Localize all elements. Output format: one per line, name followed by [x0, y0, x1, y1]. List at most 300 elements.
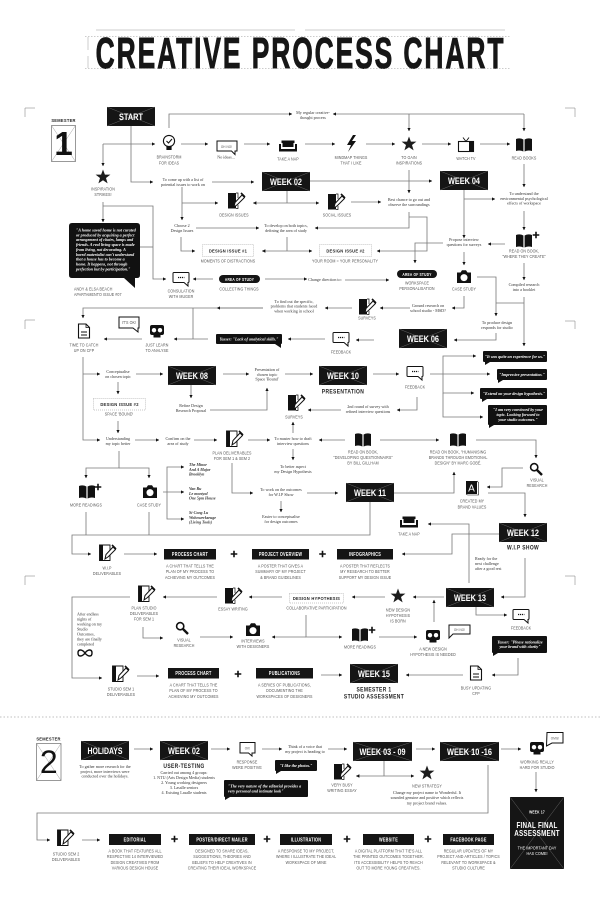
- label: new hypothesis: HYPOTHESIS: [386, 613, 410, 618]
- icon: feedback: [333, 332, 349, 346]
- text: facebook description: REGULAR UPDATES OF MY: [444, 848, 493, 854]
- arrow: [83, 373, 100, 375]
- callout: editorial nature: "The very nature of the editorial provides a: [228, 784, 301, 788]
- callout: quote 3: "Extend on your design hypothesis.": [483, 391, 545, 396]
- icon: book 3: [450, 433, 466, 446]
- text: ground research: Ground research on: [412, 303, 444, 308]
- label: to gain inspirations: INSPIRATIONS: [396, 160, 422, 166]
- label: more readings 2: MORE READINGS: [344, 644, 376, 650]
- panel: semester 2 marker: [36, 736, 61, 780]
- icon: skull 2: [426, 630, 440, 642]
- callout: quote 4: "I am very convinced by your: [493, 407, 543, 412]
- box: website: WEBSITE: [379, 837, 398, 842]
- callout: home quote: [69, 223, 140, 288]
- text: source: ANDY & ELSA BEACH: [74, 286, 112, 292]
- label: to gain inspirations: TO GAIN: [401, 154, 417, 160]
- text: produce design: responds for studio: [481, 325, 513, 330]
- arrow: [480, 143, 510, 145]
- week 12: WEEK 12: [507, 527, 539, 538]
- label: surveys: SURVEYS: [358, 315, 376, 321]
- label: developing questionnaires: BY BILL GILLHAM: [347, 460, 379, 466]
- box: process chart 2: [168, 668, 219, 678]
- arrow: [352, 596, 385, 598]
- arrow: [523, 164, 525, 187]
- label: new design needed: A NEW DESIGN: [419, 646, 447, 652]
- week 11: [346, 483, 394, 502]
- text: compiled research: Compiled research: [509, 282, 539, 287]
- arrow: [196, 227, 259, 229]
- panel: semester 2 marker: SEMESTER: [36, 736, 61, 742]
- callout: home quote: that a house has to become a: [76, 257, 125, 262]
- label: mindmap: THAT I LIKE: [341, 160, 362, 166]
- text: change direction: Change direction to:: [308, 277, 342, 282]
- arrow: [315, 212, 409, 228]
- callout: quote 2: [497, 369, 547, 383]
- icon: A brand: A: [468, 484, 475, 494]
- arrow: [356, 339, 374, 341]
- text: process chart description 2: ACHIEVING MY OUTCOMES: [168, 693, 219, 699]
- arrow: booklet to quotes: [523, 297, 525, 346]
- label: plan deliverables: FOR SEM 1 & SEM 2: [214, 455, 251, 461]
- arrow: [476, 440, 536, 458]
- arrow: [306, 615, 342, 637]
- icon: star new strategy: [420, 766, 434, 779]
- arrow: [262, 748, 282, 750]
- week 08: WEEK 08: [176, 370, 208, 381]
- text: easier conceptualise: for design outcomes: [264, 519, 298, 524]
- text: presentation of topic: chosen topic: [257, 372, 277, 377]
- holidays: [81, 741, 129, 760]
- text: master draft: interview questions: [277, 441, 309, 446]
- label: space bound: SPACE 'BOUND': [105, 411, 133, 417]
- start box: [107, 107, 155, 126]
- icon: star: [96, 170, 110, 183]
- arrow: [305, 143, 335, 145]
- text: publications description: A SERIES OF PUBLICATIONS,: [258, 682, 311, 688]
- arrow: [285, 373, 313, 375]
- label: feedback: FEEDBACK: [331, 349, 351, 355]
- label: busy updating: CFP: [472, 690, 480, 696]
- arrow: [211, 748, 230, 750]
- callout: editorial nature: very personal and intimate look": [228, 788, 284, 794]
- arrow: [223, 373, 249, 375]
- icon: magnifier 2: [177, 623, 188, 634]
- box: facebook: FACEBOOK PAGE: [450, 837, 487, 842]
- text: after endless nights: Outcomes,: [77, 632, 95, 638]
- arrow: brainstorm up: [169, 114, 292, 128]
- arrow: [117, 421, 119, 433]
- arrow: [443, 356, 476, 374]
- arrow: across to doc: [83, 308, 263, 318]
- arrow: [86, 451, 119, 478]
- label: consultation: CONSULATION: [168, 288, 194, 294]
- arrow: [454, 333, 496, 340]
- arrow: [288, 338, 325, 340]
- callout: home quote: friends. A real living space is made: [76, 242, 135, 247]
- arrow: [366, 143, 395, 145]
- panel: final assessment: FINAL FINAL: [516, 820, 558, 830]
- week 04: [440, 171, 488, 190]
- text: work on outcomes: To work on the outcomes: [260, 487, 302, 492]
- icon: A brand: [466, 481, 478, 495]
- label: studio sem 1: DELIVERABLES: [107, 692, 135, 697]
- text: after endless nights: working on my: [77, 622, 103, 626]
- week 13: WEEK 13: [454, 592, 486, 603]
- icon: tv: [458, 138, 474, 152]
- arrow: [190, 385, 192, 398]
- label: plan studio: DELIVERABLES: [130, 611, 158, 616]
- callout: home quote: bored materialist can't understand: [76, 252, 135, 257]
- label: brainstorm: BRAINSTORM: [157, 154, 182, 160]
- label: interviews: INTERVIEWS: [241, 638, 265, 644]
- label: consultation: WITH MUGER: [169, 294, 193, 299]
- box: infographics: INFOGRAPHICS: [349, 551, 381, 557]
- icon: feedback 2: [407, 366, 423, 380]
- text: choose 2: Design Issues: [171, 228, 194, 233]
- arrow: [397, 397, 417, 410]
- callout: pill area of study 1: [219, 275, 260, 283]
- label: inspiration strikes: STRIKES!: [94, 191, 112, 197]
- week 02 s2: [160, 741, 208, 760]
- text: case study 3: (Living Tools): [189, 520, 213, 525]
- icon: omg bubble: [546, 732, 563, 746]
- icon: sofa 2: [400, 516, 418, 528]
- arrow: [523, 263, 525, 280]
- icon: ok bubble: OK!: [245, 746, 250, 751]
- text: after endless nights: completed: [77, 642, 94, 646]
- callout: home quote: perfection but by participation.": [75, 266, 130, 271]
- text: refine design: Refine Design: [179, 403, 203, 408]
- arrow: [328, 748, 347, 750]
- text: case study 2: Le montyal: [188, 491, 208, 496]
- icon: book plus: [516, 232, 539, 248]
- label: just learn: TO ANALYSE: [145, 347, 169, 353]
- label: studio sem 1: STUDIO SEM 1: [108, 686, 135, 692]
- arrow: case study to ground: [452, 296, 464, 308]
- text: conceptualise: Conceptualise: [106, 369, 130, 374]
- text: master draft: To master how to draft: [274, 436, 312, 441]
- text: conceptualise: on chosen topic: [105, 374, 131, 379]
- icon: surveys 2: [288, 395, 305, 410]
- text: case study 3: Si-Cong Lu: [189, 510, 209, 515]
- arrow: issues to choose: [181, 187, 183, 220]
- panel: final assessment: THE IMPORTANT DAY: [518, 845, 556, 851]
- label: new hypothesis: NEW DESIGN: [386, 607, 410, 613]
- arrow: [380, 439, 439, 441]
- arrow: [345, 279, 389, 281]
- box: illustration: ILLUSTRATION: [291, 837, 321, 842]
- label: new hypothesis: IS BORN: [390, 618, 406, 624]
- arrow: [422, 143, 451, 145]
- callout: quote 4: topic. Looking forward to: [496, 412, 540, 417]
- icon: plus: [344, 836, 350, 842]
- icon: studio sem 1: [112, 666, 129, 682]
- text: groups: 2. Young working designers: [161, 780, 207, 785]
- arrow: [163, 596, 217, 598]
- icon: plus: [235, 671, 241, 677]
- text: groups: 1. NTU (Arts Design Media) students: [153, 775, 215, 780]
- box: design issue 1: DESIGN ISSUE #1: [209, 248, 247, 253]
- label: visual research: RESEARCH: [527, 482, 547, 488]
- heading: wip show: W.I.P SHOW: [507, 545, 539, 552]
- arrow: [210, 388, 267, 410]
- arrow: mid: [217, 307, 263, 309]
- arrow: [194, 439, 217, 441]
- box: design issue 2: DESIGN ISSUE #2: [326, 248, 365, 253]
- arrow: [443, 393, 483, 417]
- text: find specific: To find out the specific,: [275, 299, 313, 305]
- arrow: [428, 524, 469, 583]
- text: better aspect: To better aspect: [280, 464, 307, 469]
- text: poster description: CREATING THEIR IDEAL WORKSPACE: [188, 865, 256, 871]
- text: process chart description: A CHART THAT TELLS THE: [166, 563, 214, 569]
- box: process chart: [164, 549, 216, 560]
- icon: plus: [425, 836, 431, 842]
- text: gather research: project, more interviews were: [81, 769, 130, 775]
- heading: semester 1 studio assessment: STUDIO ASSESSMENT: [344, 694, 404, 701]
- callout: quote 3: [480, 388, 547, 402]
- text: infographics description: MY RESEARCH TO BETTER: [340, 569, 390, 574]
- label: essay writing: ESSAY WRITING: [218, 606, 248, 612]
- arrow: [380, 307, 410, 309]
- arrow: [124, 553, 157, 555]
- arrow: to design issue 2: [377, 243, 427, 251]
- heading: semester 1 studio assessment: SEMESTER 1: [357, 687, 392, 694]
- icon: its ok bubble: IT'S OK!: [122, 319, 136, 325]
- box: project overview: [252, 549, 309, 560]
- arrow: [248, 439, 270, 441]
- text: publications description: WORKSPACES OF DESIGNERS: [256, 693, 313, 699]
- icon: skull: [150, 325, 164, 338]
- arrow: [463, 252, 465, 265]
- arrow: [143, 627, 163, 638]
- text: poster description: SUGGESTIONS, THEORIES AND: [193, 854, 251, 859]
- label: visual research: VISUAL: [530, 477, 544, 483]
- arrow: inspiration to callout: [102, 202, 104, 222]
- text: infographics description: SUPPORT MY DESIGN ISSUE: [339, 574, 391, 580]
- arrow: [402, 534, 499, 554]
- arrow: [535, 772, 537, 792]
- arrow: [212, 181, 254, 183]
- icon: design issues: [228, 193, 245, 208]
- label: mindmap: MINDMAP THINGS: [335, 154, 367, 160]
- box: publications: [256, 668, 313, 678]
- week 15: [350, 664, 398, 683]
- text: produce design: To produce design: [482, 320, 512, 325]
- arrow: to studio sem 2: [37, 765, 488, 840]
- arrow: [232, 463, 253, 493]
- text: after endless nights: they are finally: [77, 636, 103, 642]
- arrow: [487, 468, 523, 487]
- panel: final assessment: WEEK 17: [529, 809, 545, 815]
- arrow: [134, 748, 153, 750]
- arrow: [307, 492, 338, 494]
- icon: book: [516, 138, 532, 152]
- arrow: choose to issue 1: [181, 237, 195, 251]
- arrow: doc down: [83, 357, 100, 440]
- arrow: [308, 409, 341, 411]
- callout: yasser: [216, 334, 282, 348]
- icon: book 2: [355, 433, 371, 446]
- icon: camera: [457, 270, 471, 283]
- callout: quote 2: "Impressive presentation.": [499, 372, 545, 377]
- text: project overview description: & BRAND GUIDELINES: [260, 574, 301, 580]
- icon: social issues: [328, 194, 345, 210]
- arrow: [244, 143, 270, 145]
- text: website description: ITS ACCESSIBILITY HELPS TO REACH: [354, 859, 423, 865]
- arrow: [325, 307, 352, 309]
- arrow: [321, 674, 342, 676]
- icon: oh no bubble: OH NO!: [221, 144, 232, 149]
- arrow: to design issues: [182, 202, 218, 204]
- text: develop both topics: defining the area of study: [265, 228, 308, 233]
- title: CREATIVE PROCESS CHART: [96, 28, 505, 78]
- text: illustration description: A RESPONSE TO MY PROJECT,: [278, 848, 334, 854]
- icon: studio sem 2: [58, 830, 74, 846]
- week 02: WEEK 02: [270, 176, 302, 187]
- text: facebook description: PROJECT AND ARTICLES / TOPICS: [437, 854, 500, 859]
- text: change name: Change my project name to Wonderful. It: [393, 790, 462, 795]
- text: presentation of topic: Presentation of: [255, 367, 280, 372]
- panel: semester 1 marker: SEMESTER: [51, 118, 76, 123]
- label: surveys 2: SURVEYS: [285, 414, 303, 420]
- text: presentation of topic: Space 'Bound': [255, 377, 279, 382]
- week 12: [499, 523, 547, 542]
- label: visual research 2: RESEARCH: [174, 642, 194, 648]
- icon: plus: [171, 836, 178, 842]
- text: process chart description: ACHIEVING MY OUTCOMES: [165, 574, 215, 580]
- week 15: WEEK 15: [358, 668, 390, 679]
- arrow: to brainstorm and star: [103, 143, 155, 145]
- box: facebook: [443, 834, 494, 845]
- label: feedback 3: FEEDBACK: [511, 625, 531, 631]
- box: poster: POSTER/DIRECT MAILER: [196, 837, 248, 842]
- week 03-09: WEEK 03 - 09: [360, 746, 406, 757]
- arrow: [119, 468, 149, 478]
- label: your room: YOUR ROOM = YOUR PERSONALITY: [312, 258, 378, 264]
- arrow: [406, 674, 463, 676]
- text: second round: 2nd round of survey with: [347, 404, 389, 409]
- label: developing questionnaires: "DEVELOPING QUESTIONNAIRS": [333, 455, 393, 460]
- arrow: [82, 839, 100, 841]
- text: ready for next: next challenge: [475, 561, 499, 566]
- box: poster: [189, 834, 255, 845]
- week 02: [262, 172, 310, 191]
- label: developing questionnaires: READ ON BOOK,: [348, 449, 378, 455]
- label: just learn: JUST LEARN: [146, 342, 168, 348]
- icon: essay: [334, 764, 351, 780]
- text: propose questions: Propose interview: [449, 237, 479, 242]
- icon: plan deliverables: [226, 431, 243, 446]
- text: editorial description: RESPECTIVE 14 INTERVIEWED: [107, 854, 163, 859]
- text: case study 1: The Minor: [189, 462, 207, 467]
- text: project overview description: SUMMARY OF MY PROJECT: [255, 569, 306, 574]
- text: develop both topics: To develop on both topics,: [264, 223, 308, 229]
- arrow: top line to book: [523, 114, 525, 131]
- callout: home quote: arrangement of chairs, lamps and: [76, 237, 134, 242]
- text: come up with list: To come up with a list of: [163, 177, 204, 182]
- text: infographics description: A POSTER THAT REFLECTS: [340, 563, 390, 569]
- text: come up with list: potential issues to work on: [161, 182, 205, 187]
- week 10-16: WEEK 10 -16: [447, 746, 492, 757]
- label: read books: READ BOOKS: [512, 155, 536, 161]
- text: publications description: DOCUMENTING THE: [266, 688, 303, 693]
- week 03-09: [353, 742, 412, 761]
- box: design hypothesis: [290, 594, 344, 603]
- arrow: to studio sem 1: [72, 597, 130, 678]
- text: best chance: observe the surroundings: [388, 202, 430, 207]
- text: easier conceptualise: Easier to conceptualise: [262, 514, 300, 519]
- arrow: [272, 636, 306, 638]
- box: design issue 2 second: [94, 398, 146, 410]
- text: after endless nights: Studio: [77, 626, 88, 632]
- text: illustration description: WHERE I ILLUSTRATE THE IDEAL: [276, 854, 337, 859]
- box: project overview: PROJECT OVERVIEW: [259, 551, 303, 557]
- arrow: [488, 243, 505, 245]
- label: very busy essay: VERY BUSY: [331, 782, 353, 788]
- arrow: [523, 211, 525, 230]
- heading: presentation: PRESENTATION: [322, 389, 364, 396]
- label: social issues: SOCIAL ISSUES: [323, 212, 351, 218]
- text: refine design: Research Proposal: [176, 408, 207, 413]
- callout: quote 1: [483, 351, 547, 365]
- text: voice: my project is heading to: [285, 749, 325, 754]
- icon: magnifier: [531, 464, 542, 475]
- text: website description: THE PRINTED OUTCOMES TOGETHER.: [353, 854, 424, 859]
- label: new design needed: HYPOTHESIS IS NEEDED: [410, 651, 456, 657]
- arrow: [464, 198, 495, 200]
- icon: oh no 2: [449, 625, 470, 638]
- arrow: [379, 636, 417, 638]
- arrow: [443, 374, 474, 393]
- arrow: inspiration to consultation: [103, 206, 166, 279]
- arrow: [292, 422, 294, 433]
- week 08: [168, 366, 216, 385]
- text: voice: Think of a voice that: [288, 744, 323, 749]
- text: groups: Carried out among 4 groups:: [160, 770, 208, 775]
- text: understand environment: effects of workspace: [507, 201, 541, 206]
- arrow: week 02 double: [253, 202, 319, 204]
- callout: editorial nature: [224, 780, 308, 800]
- week 04: WEEK 04: [448, 175, 481, 186]
- text: process chart description: PLAN OF MY PROCESS TO: [166, 569, 215, 574]
- icon: ok bubble: [240, 742, 255, 756]
- panel: semester 2 marker: 2: [40, 744, 58, 780]
- arrow: [135, 439, 159, 441]
- box: illustration: [280, 834, 332, 845]
- icon: essay writing: [225, 588, 242, 604]
- arrow: week 02 to week 04: [310, 180, 432, 182]
- icon: surveys: [359, 299, 376, 314]
- box: infographics: [337, 549, 393, 560]
- text: change name: sounded genuine and positive which reflects: [391, 795, 464, 800]
- label: take a nap 2: TAKE A NAP: [398, 531, 420, 537]
- icon: camera case: [143, 485, 157, 498]
- arrow: [416, 748, 435, 750]
- label: wip deliverables: W.I.P: [102, 565, 112, 571]
- callout: yasser: Yasser: "Lack of analytical skills.": [220, 336, 278, 342]
- label: more readings: MORE READINGS: [70, 502, 102, 508]
- arrow: [200, 636, 233, 638]
- icon: plan studio: [138, 586, 155, 602]
- text: after endless nights: nights of: [77, 616, 92, 622]
- label: take a nap: TAKE A NAP: [277, 156, 299, 162]
- arrow: [265, 278, 307, 280]
- box: design issue 2: [320, 244, 372, 256]
- label: humanising brands: READ ON BOOK, "HUMANISING: [430, 449, 486, 455]
- arrow: [408, 170, 410, 193]
- icon: lightning: [347, 135, 356, 152]
